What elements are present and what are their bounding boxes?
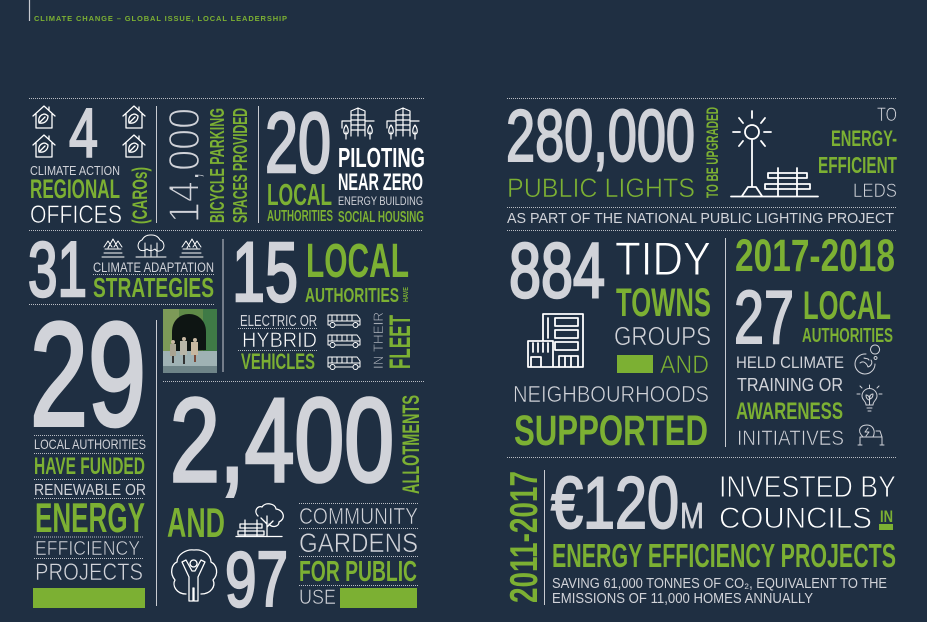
- label: efficiency: EFFICIENCY: [35, 538, 140, 560]
- label: allotments: ALLOTMENTS: [398, 395, 425, 494]
- label: vehicles: VEHICLES: [241, 349, 315, 374]
- label: to be upgraded: TO BE UPGRADED: [703, 107, 722, 198]
- stat: 4: 4: [69, 94, 98, 172]
- panel: climate training: [734, 230, 895, 450]
- label: held climate: HELD CLIMATE: [736, 353, 844, 372]
- text: emissions: EMISSIONS OF 11,000 HOMES ANNUALLY: [552, 591, 813, 607]
- panel: electric fleet: [232, 225, 417, 374]
- label: electric or: ELECTRIC OR: [240, 313, 317, 330]
- icon: forests: [102, 235, 203, 257]
- label: towns: TOWNS: [616, 281, 711, 325]
- label: social housing: SOCIAL HOUSING: [338, 209, 424, 226]
- stat: 97: 97: [225, 535, 288, 622]
- label: renewable or: RENEWABLE OR: [34, 482, 146, 499]
- stat: 15: 15: [232, 225, 298, 319]
- label: spaces provided: SPACES PROVIDED: [230, 108, 252, 223]
- panel: bicycle parking: [160, 108, 252, 223]
- label: in: IN: [880, 507, 893, 526]
- green bar: [340, 588, 417, 608]
- panel: public lights: [506, 96, 897, 203]
- label: local authorities: LOCAL AUTHORITIES: [34, 436, 146, 452]
- stat: 20: 20: [265, 96, 331, 191]
- label: groups: GROUPS: [614, 321, 711, 351]
- label: awareness: AWARENESS: [736, 398, 843, 425]
- label: local: LOCAL: [267, 177, 332, 212]
- stat: 31: 31: [28, 225, 87, 313]
- label: authorities: AUTHORITIES: [267, 208, 333, 225]
- label: offices: OFFICES: [30, 201, 122, 229]
- label: 2011-2017: 2011-2017: [503, 471, 546, 603]
- stat: 2,400: 2,400: [170, 374, 394, 507]
- icon: light bulb with leaf: [857, 385, 882, 411]
- icon: buses: [328, 315, 360, 370]
- label: regional: REGIONAL: [30, 174, 120, 204]
- panel: adaptation strategies: [28, 225, 215, 313]
- green underline block: [879, 524, 893, 530]
- label: projects: PROJECTS: [35, 559, 143, 586]
- label: invested by: INVESTED BY: [719, 469, 896, 504]
- label: fleet: FLEET: [384, 315, 417, 369]
- stat: 27: 27: [734, 275, 794, 359]
- text: savings: SAVING 61,000 TONNES OF CO₂, EQUIVALENT TO THE: [552, 576, 887, 592]
- label: near zero: NEAR ZERO: [338, 169, 423, 196]
- label: climate action: CLIMATE ACTION: [30, 163, 120, 178]
- label: hybrid: HYBRID: [242, 329, 317, 352]
- icon: park bench and tree: [236, 504, 283, 536]
- stat: 14,000: 14,000: [160, 108, 209, 223]
- label: national public lighting project: AS PART OF THE NATIONAL PUBLIC LIGHTING PROJECT: [507, 210, 894, 227]
- label: have: HAVE: [401, 287, 410, 302]
- label: have funded: HAVE FUNDED: [34, 453, 145, 480]
- label: local: LOCAL: [306, 235, 409, 288]
- stat: 280,000: 280,000: [506, 96, 695, 177]
- photo: cyclists in tunnel: [163, 309, 217, 373]
- label: training or: TRAINING OR: [737, 374, 843, 395]
- left page panel: [28, 94, 425, 622]
- label: gardens: GARDENS: [299, 528, 418, 558]
- label: in their: IN THEIR: [370, 312, 386, 369]
- label: public lights: PUBLIC LIGHTS: [507, 173, 695, 203]
- label: CAROs: (CAROs): [129, 167, 152, 224]
- label: supported: SUPPORTED: [514, 407, 708, 455]
- label: tidy: TIDY: [615, 232, 711, 285]
- label: use: USE: [299, 586, 336, 609]
- icon: person tree: [172, 550, 217, 601]
- label: and: AND: [167, 499, 225, 546]
- label: authorities: AUTHORITIES: [305, 285, 399, 307]
- icon: street light and bench: [731, 111, 818, 196]
- right page panel: [503, 96, 897, 607]
- icon: buildings: [342, 108, 419, 139]
- panel: investment: [503, 463, 896, 607]
- label: and: AND: [660, 351, 709, 379]
- stat: M suffix: M: [680, 495, 704, 536]
- stat: 29: 29: [30, 293, 146, 457]
- label: neighbourhoods: NEIGHBOURHOODS: [513, 381, 709, 407]
- panel: tidy towns: [509, 226, 711, 455]
- green block: [617, 355, 653, 373]
- label: to: TO: [877, 105, 897, 126]
- stat: €120: €120: [551, 463, 679, 544]
- header text: CLIMATE CHANGE – GLOBAL ISSUE, LOCAL LEADERSHIP: [34, 14, 287, 23]
- panel: near zero social housing: [265, 96, 425, 226]
- stat: 884: 884: [509, 226, 605, 314]
- label: piloting: PILOTING: [338, 142, 425, 173]
- label: councils: COUNCILS: [719, 502, 872, 535]
- panel: climate action regional offices: [30, 94, 152, 229]
- panel: allotments and gardens: [167, 374, 425, 622]
- label: energy: ENERGY: [35, 494, 145, 541]
- icon: eco houses: [33, 106, 145, 157]
- green bar: [33, 588, 145, 608]
- icon: buildings: [528, 314, 583, 367]
- label: leds: LEDS: [853, 181, 897, 202]
- label: for public: FOR PUBLIC: [299, 556, 417, 588]
- panel: renewable funding: [30, 293, 146, 608]
- label: community: COMMUNITY: [299, 503, 418, 529]
- label: initiatives: INITIATIVES: [737, 426, 844, 450]
- label: strategies: STRATEGIES: [93, 272, 214, 303]
- label: climate adaptation: CLIMATE ADAPTATION: [93, 260, 214, 275]
- icon: electric car: [858, 425, 884, 445]
- label: energy building: ENERGY BUILDING: [338, 196, 423, 208]
- icon: globe with pin: [855, 345, 880, 374]
- label: bicycle parking: BICYCLE PARKING: [207, 108, 229, 223]
